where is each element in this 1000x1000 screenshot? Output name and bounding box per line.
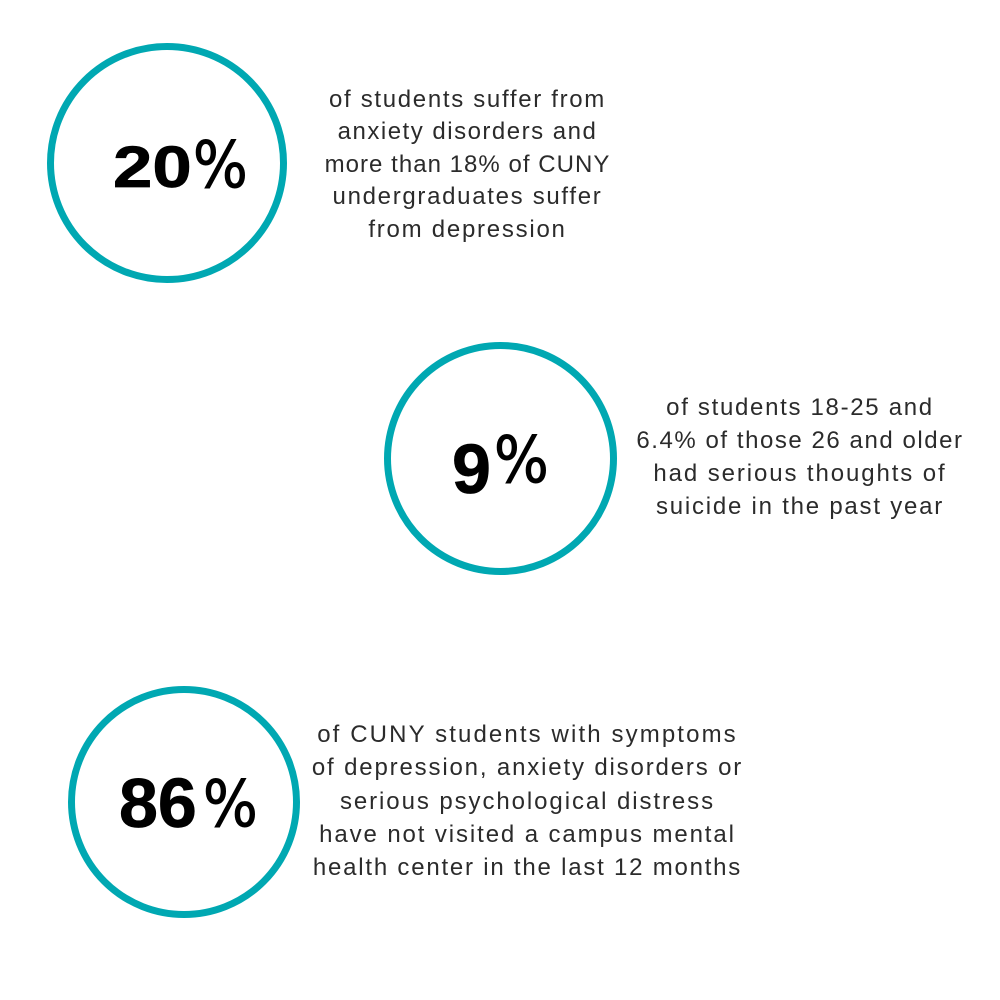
circle ring: 86% [68, 686, 300, 918]
text: campus mental health: have not visited a campus mental [319, 821, 736, 848]
number: 9%: 9 [452, 430, 491, 508]
text: suicidal thoughts: suicide in the past year [656, 493, 944, 520]
stat block: 86% [68, 686, 743, 918]
text: suicidal thoughts [636, 394, 964, 520]
text: anxiety and depression: anxiety disorders and [338, 118, 597, 145]
text: anxiety and depression: undergraduates suffer [333, 183, 602, 210]
text: campus mental health [312, 721, 743, 881]
number: 86%: 86 [119, 764, 197, 842]
number: 20% [113, 129, 248, 203]
circle ring: 20% [47, 43, 287, 283]
text: campus mental health: of depression, anxiety disorders or [312, 754, 743, 781]
number: 20%: 20 [113, 135, 192, 200]
number: 86% [119, 764, 258, 842]
text: campus mental health: health center in the last 12 months [313, 854, 742, 881]
number: 9% [452, 424, 549, 508]
text: suicidal thoughts: 6.4% of those 26 and older [636, 427, 964, 454]
text: anxiety and depression: from depression [368, 216, 567, 242]
number: 9%: % [494, 424, 549, 498]
stat block: 20% [47, 43, 610, 283]
circle ring: 9% [384, 342, 616, 575]
text: anxiety and depression: more than 18% of CUNY [325, 150, 610, 178]
number: 86%: % [203, 768, 258, 842]
text: suicidal thoughts: had serious thoughts of [653, 460, 947, 487]
number: 20%: % [193, 129, 248, 203]
stat block: 9% [384, 342, 964, 575]
text: anxiety and depression: of students suffer from [329, 86, 606, 112]
text: campus mental health: serious psychological distress [340, 788, 715, 815]
text: campus mental health: of CUNY students with symptoms [317, 721, 738, 748]
text: suicidal thoughts: of students 18-25 and [666, 394, 934, 420]
text: anxiety and depression [325, 86, 610, 242]
